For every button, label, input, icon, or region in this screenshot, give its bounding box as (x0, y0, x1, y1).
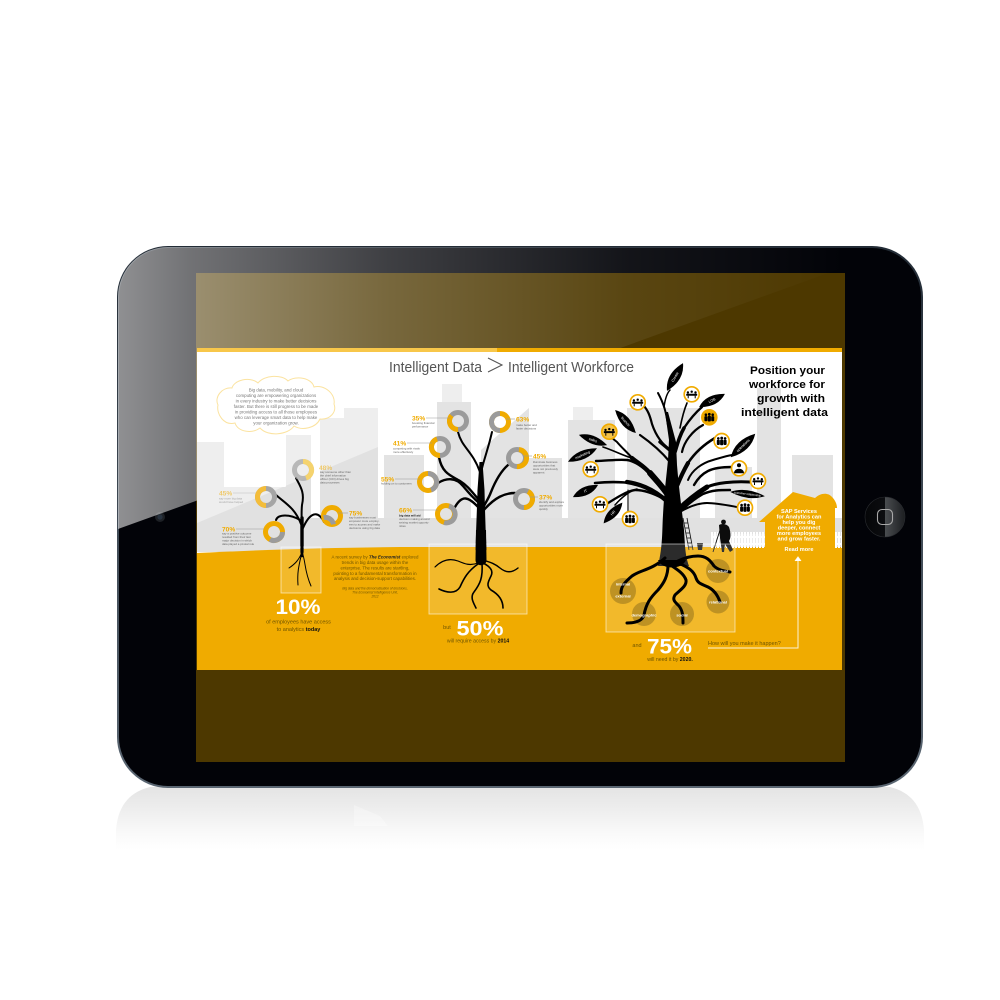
title: Intelligent Data (389, 360, 483, 376)
house callout: more employees (777, 531, 821, 537)
leaf: customer relationship: customer relationship (734, 490, 762, 498)
house callout: Read more (785, 547, 813, 553)
label 70%: resulted from their last (222, 535, 251, 539)
small tree (219, 461, 381, 552)
house callout: for Analytics can (777, 514, 822, 520)
label 48%: 48% (319, 465, 332, 472)
tablet reflection (116, 787, 924, 850)
root labels: contextual (708, 568, 728, 574)
donut 63% (492, 414, 508, 430)
fence left (711, 532, 765, 548)
survey text: pointing to a fundamental transformation in (333, 571, 417, 576)
label 35%: performance (412, 424, 429, 428)
label 55% (381, 476, 420, 486)
fence right (835, 532, 842, 548)
leaf: marketing: marketing (575, 450, 591, 460)
label 75%: 75% (349, 510, 362, 518)
leaf: create: Create (671, 371, 680, 383)
label 70%: say a positive outcome (222, 532, 252, 536)
title (389, 358, 634, 376)
label 48% text: officer (CIO) drives big (320, 477, 349, 481)
donut 41% (431, 438, 448, 456)
75% stat: will need it by 2020. (647, 657, 693, 663)
label 37%: quickly (539, 507, 548, 511)
label 66% (399, 508, 438, 528)
label 41%: competing with rivals (393, 446, 420, 450)
label 37%: opportunities more (539, 504, 563, 508)
label 45%: illuminate business (533, 460, 558, 464)
icon circles (583, 387, 766, 526)
root labels: internal (616, 582, 630, 586)
arrow to read more (708, 557, 801, 648)
tablet body (117, 246, 923, 788)
house callout: help you dig (783, 520, 816, 526)
leaf: operations (727, 430, 759, 461)
label 45%: would have helped (219, 500, 243, 504)
leaf: HR: HR (610, 510, 617, 516)
75% stat (632, 636, 693, 663)
50% stat (443, 618, 509, 644)
root labels: relational (709, 600, 727, 604)
label 75%: decisions using big data (349, 526, 380, 530)
camera (155, 512, 165, 522)
label 66%: nities (399, 524, 406, 528)
leaf: create (663, 361, 687, 393)
cloud callout: computing are empowering organizations (236, 393, 317, 398)
big trunk (658, 412, 689, 566)
cloud callout: in every industry to make better decisions (236, 398, 317, 404)
10% stat: to analytics today (277, 627, 321, 633)
donut 35% (449, 412, 466, 430)
donut 75% (324, 508, 340, 526)
how will you make it happen: How will you make it happen? (708, 641, 781, 647)
root labels: external (615, 594, 631, 598)
label 70% (222, 526, 264, 546)
label 45%: 45% (219, 490, 232, 498)
survey text: The Economist Intelligence Unit, (352, 590, 398, 594)
heading (741, 365, 829, 419)
medium roots (435, 530, 518, 608)
10% stat: 10% (276, 596, 321, 619)
label 75%: ees to access and make (349, 522, 381, 526)
top rule (197, 348, 842, 352)
donut 70% (266, 524, 282, 540)
75% stat: and (632, 643, 642, 649)
donut 45% (258, 488, 274, 506)
root labels (615, 568, 728, 618)
donut 37% (516, 490, 533, 508)
medium root box (429, 530, 527, 614)
label 75%: empower more employ- (349, 519, 379, 523)
75% stat: 75% (647, 636, 692, 658)
root topic circles (610, 559, 730, 626)
cloud callout: who can leverage smart data to help make (235, 415, 318, 420)
home button (865, 497, 905, 537)
50% stat: 50% (456, 618, 504, 640)
small roots (289, 545, 311, 586)
label 41%: 41% (393, 440, 406, 448)
survey text: trends in big data usage within the (342, 560, 409, 565)
tablet screen (196, 273, 845, 762)
label 45% (523, 454, 558, 474)
survey text: A recent survey by The Economist explored (332, 554, 419, 560)
house callout (759, 492, 837, 560)
label 48% text: the chief information (320, 474, 346, 478)
label 48% text: data processes (320, 480, 340, 484)
big branches (595, 390, 750, 513)
label 35%: boosting financial (412, 421, 435, 425)
cloud callout: in providing access to all those employees (235, 410, 318, 414)
donut 66% (438, 506, 455, 523)
big tree (566, 361, 766, 566)
label 70%: data played a pivotal role (222, 542, 255, 546)
bucket (697, 543, 703, 550)
label 63%: make better and (516, 423, 537, 427)
leaf: operations: operations (736, 438, 751, 453)
cloud callout: faster. But there is still progress to be made (234, 404, 319, 409)
10% stat: of employees have access (266, 620, 331, 626)
label 37%: identify and explore (539, 500, 564, 504)
50% stat: but (443, 625, 451, 631)
label 63% (506, 416, 537, 430)
label 70%: 70% (222, 526, 235, 534)
root labels: demographic (631, 612, 657, 618)
cloud callout: Big data, mobility, and cloud (249, 388, 304, 392)
label 35%: 35% (412, 416, 425, 422)
label 75% (338, 510, 381, 530)
leaf: HR (600, 500, 626, 526)
leaf: finance (612, 407, 639, 436)
label 45% (219, 490, 256, 504)
title: Intelligent Workforce (508, 360, 634, 376)
label 63%: 63% (516, 416, 529, 424)
ground (197, 547, 842, 670)
digger silhouette (713, 520, 733, 552)
survey text: analysis and decision-support capabilities. (334, 576, 416, 581)
screen right strip (842, 348, 845, 670)
ladder (683, 518, 693, 550)
10% stat (266, 596, 331, 633)
survey text (332, 554, 419, 598)
label 55%: holding on to customers (381, 482, 412, 486)
50% stat: will require access by 2014 (447, 638, 509, 644)
medium tree (381, 412, 564, 550)
medium trunk and branches (438, 432, 515, 550)
leaf: IT: IT (583, 488, 589, 494)
big root box (606, 544, 735, 632)
label 66%: 66% (399, 508, 412, 514)
big roots (621, 556, 730, 623)
label 66%: big data will aid (399, 514, 421, 518)
cloud callout: your organization grow. (253, 420, 299, 426)
root labels: social (676, 612, 688, 618)
label 70%: major decision in which (222, 538, 252, 542)
heading: workforce for (748, 379, 826, 391)
small root box (281, 545, 321, 593)
label 45%: opportunities that (533, 464, 555, 468)
label 66%: decision making around (399, 517, 430, 521)
house callout: and grow faster. (778, 536, 821, 542)
leaf: finance: finance (620, 416, 631, 427)
survey text: Big data and the democratisation of decisions, (342, 586, 408, 590)
label 37%: 37% (539, 494, 552, 502)
leaf: LOB: LOB (708, 397, 717, 404)
leaf: IT (571, 481, 600, 501)
small tree branches (276, 478, 324, 552)
donut 48% (294, 461, 312, 478)
leaf: sales (578, 431, 608, 449)
label 55%: 55% (381, 476, 394, 484)
survey text: 2012 (370, 594, 379, 598)
heading: Position your (750, 365, 826, 377)
label 41%: more effectively (393, 450, 414, 454)
label 48% text: say someone other than (320, 470, 351, 474)
donut 55% (420, 473, 437, 490)
house callout: deeper, connect (778, 526, 820, 532)
label 66%: seizing market opportu- (399, 520, 429, 524)
donut 45% right (508, 450, 527, 467)
infographic panel (197, 348, 842, 670)
label 45%: say more big data (219, 496, 242, 500)
label 45%: 45% (533, 454, 546, 460)
label 35% (412, 416, 450, 428)
label 75%: say businesses must (349, 516, 376, 520)
label 41% (393, 440, 432, 454)
label 45%: were not previously (533, 467, 558, 471)
leaf: sales: sales (588, 437, 598, 444)
survey text: enterprise. The results are startling, (341, 566, 409, 570)
leaf: LOB (697, 390, 727, 411)
heading: growth with (757, 393, 825, 405)
leaf: marketing (566, 444, 599, 466)
label 48% text (320, 470, 351, 484)
label 63%: faster decisions (516, 426, 537, 430)
cloud callout (217, 376, 335, 434)
glass glare (118, 247, 741, 529)
heading: intelligent data (741, 407, 829, 419)
label 45%: apparent (533, 470, 545, 474)
skyline (197, 384, 842, 552)
panel background (197, 348, 842, 670)
house callout: SAP Services (781, 509, 817, 515)
label 37% (530, 494, 564, 511)
leaf: customer relationship (730, 488, 765, 500)
